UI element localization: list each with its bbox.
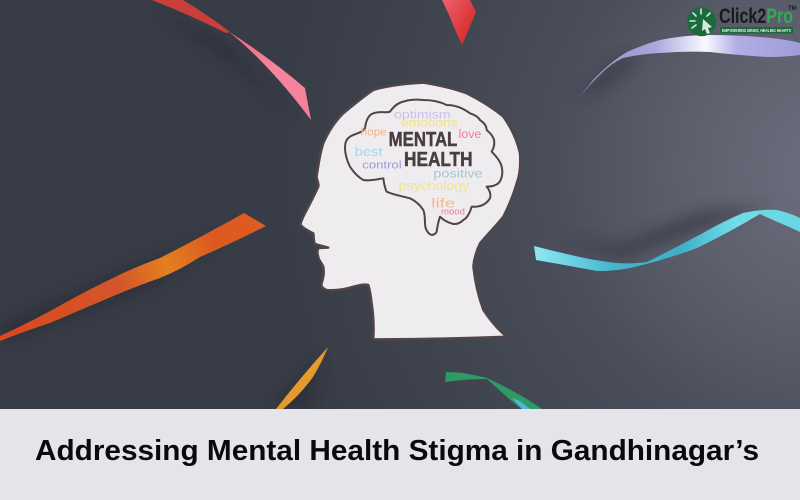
title: Addressing Mental Health Stigma in Gandhinagar’s — [35, 435, 759, 467]
brain words: life — [431, 196, 455, 210]
ribbon shadows — [0, 6, 770, 410]
logo wordmark: Click2Pro — [719, 5, 793, 28]
head illustration — [301, 83, 520, 339]
brain words — [355, 108, 483, 216]
ribbon: green bottom — [445, 372, 542, 409]
brain words: optimism — [394, 108, 451, 122]
ribbon: teal right — [534, 210, 800, 271]
brain words: control — [362, 160, 402, 172]
brain outline — [345, 100, 502, 235]
title band — [0, 409, 800, 500]
brain words: psychology — [399, 178, 470, 193]
brain words: love — [459, 127, 482, 141]
ribbon: yellow-orange bottom — [276, 347, 328, 409]
ribbon: orange left — [0, 213, 266, 341]
logo: Click2Pro — [687, 5, 797, 36]
brain words: hope — [361, 127, 387, 139]
brain words: mood — [441, 206, 465, 216]
ribbon: red top center — [442, 0, 476, 45]
logo icon: click burst — [687, 7, 716, 36]
heading: mental health: HEALTH — [404, 149, 473, 171]
ribbon: red-pink top left — [152, 0, 311, 120]
ribbon: lavender top right — [576, 35, 800, 101]
heading: mental health — [389, 129, 473, 171]
logo trademark: TM — [788, 6, 797, 12]
head silhouette — [301, 83, 520, 339]
brain words: positive — [433, 167, 483, 181]
brain words: emotions — [401, 116, 458, 130]
heading: mental health: MENTAL — [389, 129, 457, 151]
brain words: best — [355, 145, 383, 159]
